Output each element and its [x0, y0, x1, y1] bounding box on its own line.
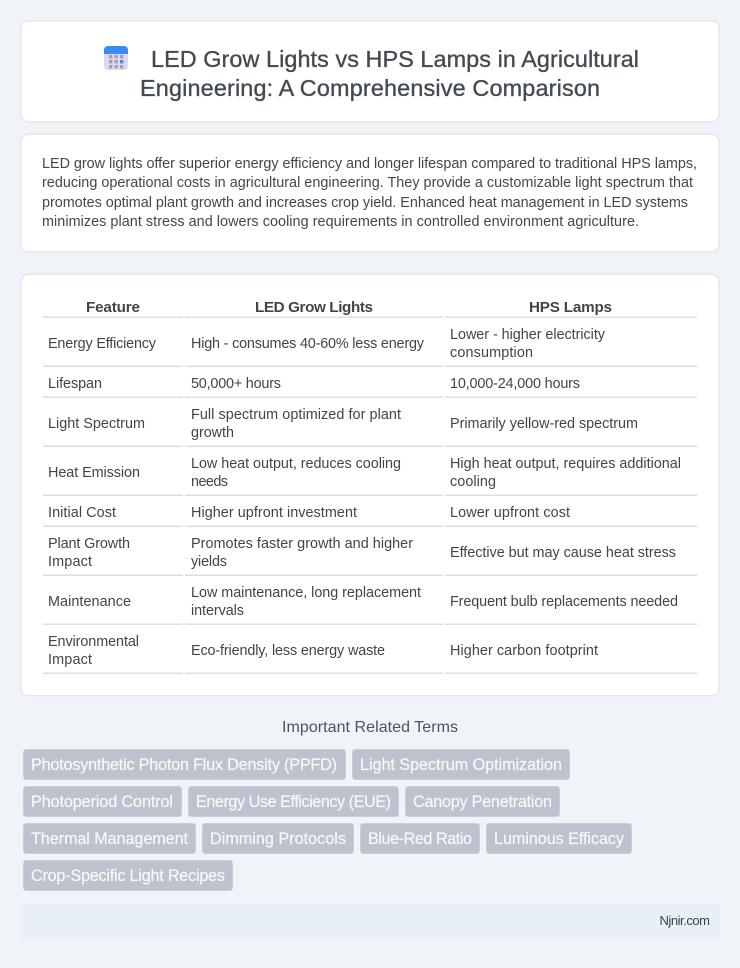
table header row: LED Grow Lights: [255, 299, 373, 316]
row: light spectrum: Full spectrum optimized for plant: [191, 407, 401, 423]
row: plant growth impact: Impact: [48, 554, 92, 570]
row: plant growth impact: Effective but may cause heat stress: [450, 545, 676, 561]
row: energy efficiency: consumption: [450, 345, 533, 361]
panel: summary paragraph: promotes optimal plant growth and increases crop yield. Enhanced heat management in LED systems: [42, 195, 688, 211]
row: light spectrum: growth: [191, 425, 234, 441]
title: [140, 46, 639, 101]
row: maintenance: [48, 585, 678, 619]
panel: summary paragraph: LED grow lights offer superior energy efficiency and longer lifespan compared to traditional HPS lamps,: [42, 156, 697, 172]
footer: [20, 904, 720, 938]
panel: comparison table: [21, 274, 719, 696]
row: maintenance: Frequent bulb replacements needed: [450, 594, 678, 610]
panel: summary paragraph: [21, 134, 719, 252]
row: lifespan: 10,000-24,000 hours: [450, 376, 580, 392]
tag: blue-red ratio: Blue-Red Ratio: [368, 830, 472, 848]
panel: summary paragraph: minimizes plant stress and lowers cooling requirements in controlled environment agriculture.: [42, 214, 639, 230]
tag: photoperiod control: [24, 786, 182, 816]
panel: title card: [21, 21, 719, 122]
row: initial cost: Higher upfront investment: [191, 505, 357, 521]
row: energy efficiency: Lower - higher electricity: [450, 327, 606, 343]
row: maintenance: Maintenance: [48, 594, 131, 610]
row: environmental impact: Higher carbon footprint: [450, 643, 598, 659]
title: LED Grow Lights vs HPS Lamps in Agricultural: [151, 46, 639, 72]
row: heat emission: Heat Emission: [48, 465, 140, 481]
row: plant growth impact: yields: [191, 554, 227, 570]
tag: thermal management: Thermal Management: [31, 830, 188, 848]
tag: dimming protocols: [202, 824, 354, 854]
tag: light spectrum optimization: Light Spectrum Optimization: [360, 756, 562, 774]
tag: crop-specific light recipes: [24, 860, 232, 890]
table header row: [86, 299, 612, 316]
tag: crop-specific light recipes: Crop-Specific Light Recipes: [31, 867, 225, 885]
tag: luminous efficacy: Luminous Efficacy: [494, 830, 625, 848]
row: light spectrum: Primarily yellow-red spectrum: [450, 416, 638, 432]
heading: important related terms: Important Related Terms: [282, 719, 458, 736]
row: environmental impact: [48, 634, 598, 668]
row: energy efficiency: [48, 327, 606, 361]
row: maintenance: intervals: [191, 603, 244, 619]
icon: calendar: [104, 46, 128, 70]
table header row: HPS Lamps: [529, 299, 612, 316]
row: initial cost: Initial Cost: [48, 505, 116, 521]
tag: dimming protocols: Dimming Protocols: [210, 830, 346, 848]
table header row: Feature: [86, 299, 140, 316]
row: heat emission: needs: [191, 474, 228, 490]
row: initial cost: Lower upfront cost: [450, 505, 570, 521]
row: initial cost: [48, 505, 570, 521]
row: environmental impact: Impact: [48, 652, 92, 668]
tag: photoperiod control: Photoperiod Control: [31, 793, 173, 811]
row: heat emission: High heat output, requires additional: [450, 456, 681, 472]
tag: energy use efficiency: Energy Use Efficiency (EUE): [196, 793, 391, 811]
row: maintenance: Low maintenance, long replacement: [191, 585, 421, 601]
tag: canopy penetration: Canopy Penetration: [413, 793, 552, 811]
row: heat emission: cooling: [450, 474, 496, 490]
row: lifespan: Lifespan: [48, 376, 102, 392]
row: heat emission: Low heat output, reduces cooling: [191, 456, 401, 472]
tag: light spectrum optimization: [352, 750, 570, 780]
tag: canopy penetration: [406, 786, 560, 816]
row: light spectrum: [48, 407, 638, 441]
row: environmental impact: Environmental: [48, 634, 139, 650]
tag: energy use efficiency: [188, 786, 398, 816]
panel: summary paragraph: reducing operational costs in agricultural engineering. They provide a customizable light spectrum that: [42, 175, 693, 191]
tag: PPFD: [24, 750, 346, 780]
title: Engineering: A Comprehensive Comparison: [140, 75, 600, 101]
row: plant growth impact: Plant Growth: [48, 536, 130, 552]
row: light spectrum: Light Spectrum: [48, 416, 145, 432]
row: lifespan: [48, 376, 580, 392]
row: heat emission: [48, 456, 681, 490]
row: environmental impact: Eco-friendly, less energy waste: [191, 643, 385, 659]
row: plant growth impact: [48, 536, 676, 570]
tag: thermal management: [24, 824, 196, 854]
tag: blue-red ratio: [360, 824, 480, 854]
related term tags: [24, 750, 632, 890]
row: energy efficiency: Energy Efficiency: [48, 336, 157, 352]
tag: luminous efficacy: [486, 824, 632, 854]
footer: Njnir.com: [660, 913, 710, 928]
row: lifespan: 50,000+ hours: [191, 376, 281, 392]
row: plant growth impact: Promotes faster growth and higher: [191, 536, 413, 552]
row: energy efficiency: High - consumes 40-60% less energy: [191, 336, 425, 352]
tag: PPFD: Photosynthetic Photon Flux Density (PPFD): [31, 756, 337, 774]
